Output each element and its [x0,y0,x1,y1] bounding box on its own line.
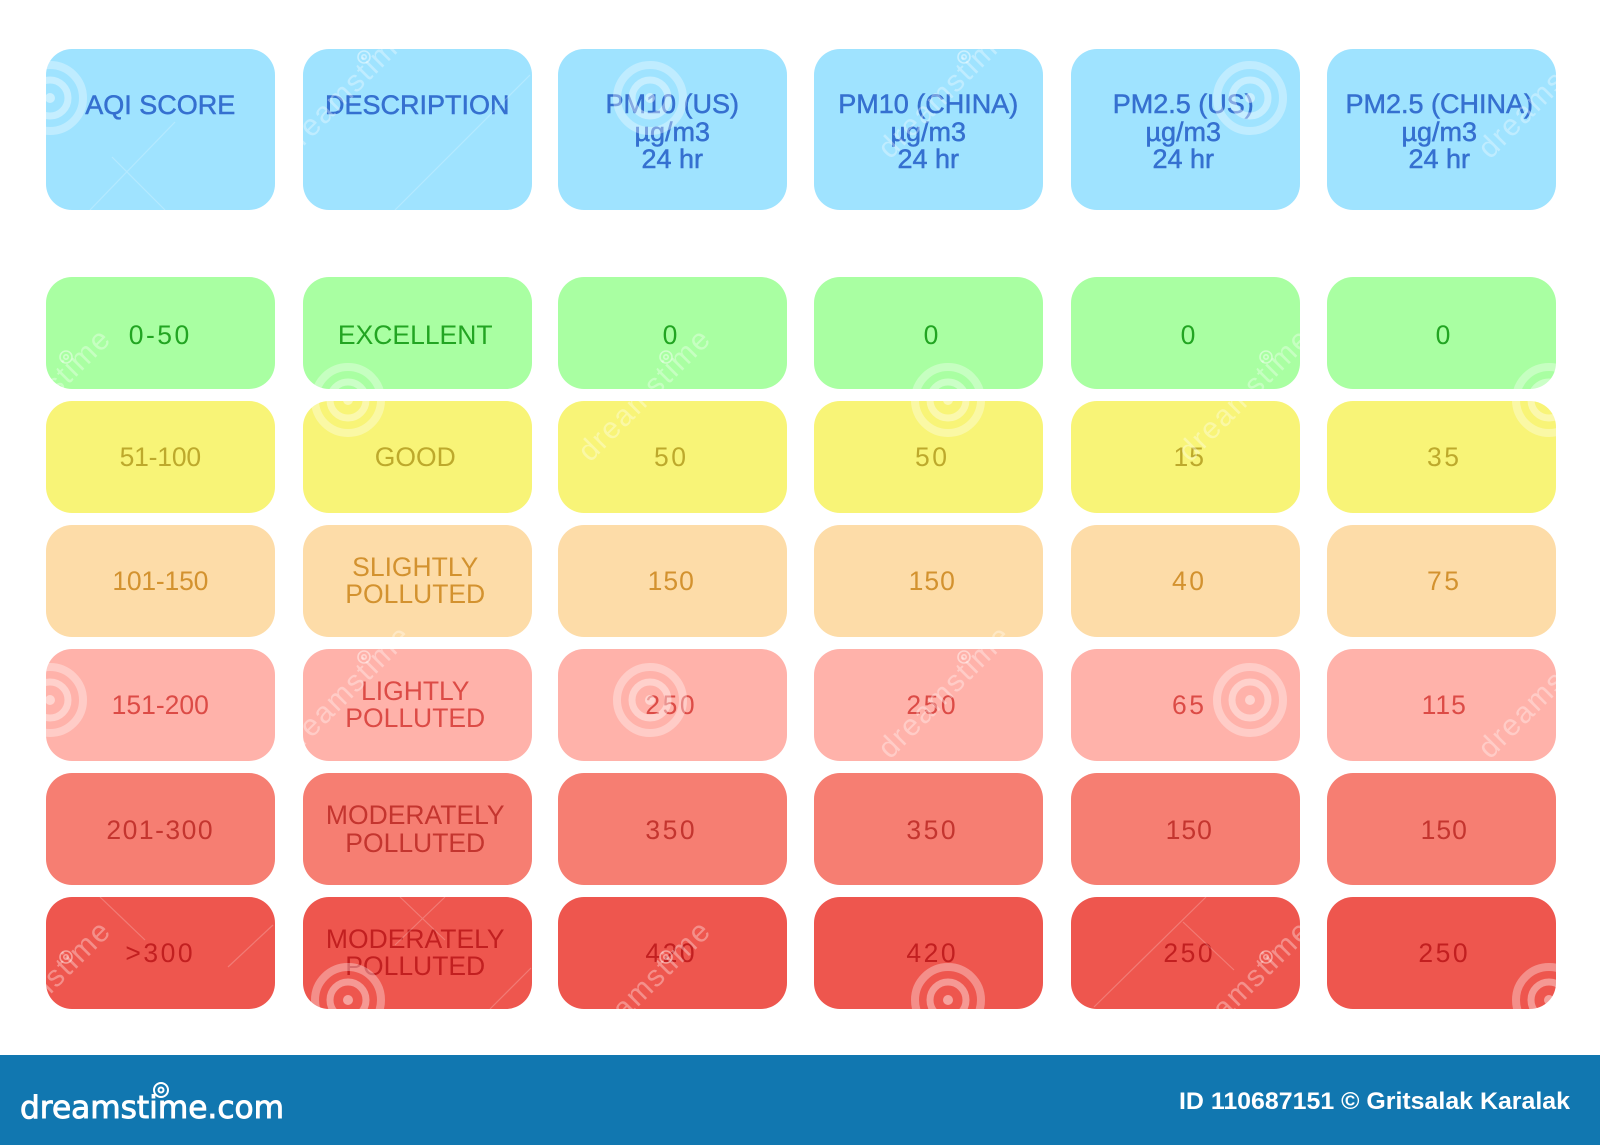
header: PM10 China: 24 hr [897,144,959,174]
header: PM10 China: µg/m3 [890,116,966,146]
description: POLLUTED [345,828,485,858]
header: PM2.5 US: PM2.5 (US) [1113,89,1254,119]
row: heavily polluted band [46,897,1556,1009]
header: PM2.5 US: µg/m3 [1145,116,1221,146]
header: PM10 US [558,49,786,210]
PM10 China value: 350 [906,815,958,845]
watermark overlay: dreamstime [572,323,717,468]
PM10 China value: 150 [909,566,956,596]
watermark overlay: dreamstime [872,620,1017,765]
description: POLLUTED [345,703,485,733]
PM2.5 US value: 40 [1172,566,1206,596]
PM2.5 China value: 150 [1421,815,1468,845]
PM10 US value [558,897,786,1009]
PM2.5 China value: 0 [1436,320,1453,350]
PM2.5 US value: 150 [1166,815,1213,845]
PM10 China value [814,525,1042,637]
row: slightly polluted [46,525,1556,637]
footer logo text: dreamstime.com [20,1090,284,1126]
PM10 China value [814,277,1042,389]
PM2.5 China value: 250 [1418,938,1470,968]
PM10 China value: 420 [906,938,958,968]
PM10 US value [558,649,786,761]
image ID and credit: ID 110687151 © Gritsalak Karalak [1179,1088,1571,1115]
PM10 China value [814,401,1042,513]
AQI range: 0-50 [129,320,192,350]
PM10 US value: 50 [654,442,688,472]
PM2.5 China value [1327,525,1556,637]
PM10 China value [814,649,1042,761]
PM2.5 US value [1071,401,1300,513]
description [303,649,532,761]
PM10 China value: 0 [924,320,941,350]
PM2.5 China value: 75 [1427,566,1461,596]
PM2.5 China value [1327,277,1556,389]
logo spiral icon [154,1083,168,1097]
PM10 US value: 150 [648,566,695,596]
description: POLLUTED [345,579,485,609]
PM2.5 US value: 15 [1174,442,1205,472]
PM10 US value: 350 [645,815,697,845]
AQI range [46,277,274,389]
PM10 US value: 250 [645,690,697,720]
header: description: DESCRIPTION [325,90,510,120]
description: EXCELLENT [338,320,493,350]
header: PM2.5 US: 24 hr [1152,144,1214,174]
AQI range [46,649,274,761]
PM2.5 China value [1327,772,1556,884]
AQI range: 101-150 [112,566,208,596]
header: PM2.5 US [1071,49,1300,210]
footer bar [0,1055,1600,1145]
header: PM2.5 China [1327,49,1556,210]
AQI range: 151-200 [112,690,209,720]
AQI range: 201-300 [106,815,214,845]
PM2.5 US value [1071,525,1300,637]
header: PM2.5 China: 24 hr [1408,144,1470,174]
AQI range [46,772,274,884]
header: PM10 China: PM10 (CHINA) [838,89,1018,119]
description: POLLUTED [345,951,485,981]
watermark overlay: dreamstime [872,20,1017,165]
PM10 China value: 50 [915,442,949,472]
PM10 US value [558,277,786,389]
description [303,525,532,637]
PM2.5 China value [1327,897,1556,1009]
watermark overlay: dreamstime [1172,323,1317,468]
watermark overlay: dreamstime [272,20,417,165]
header: PM10 US: µg/m3 [634,116,710,146]
description: SLIGHTLY [352,552,478,582]
header: AQI score: AQI SCORE [85,90,235,120]
PM2.5 US value: 250 [1163,938,1215,968]
description [303,277,532,389]
PM2.5 US value: 0 [1181,320,1198,350]
header: PM2.5 China: PM2.5 (CHINA) [1345,89,1533,119]
AQI range: 51-100 [120,442,201,472]
PM10 China value [814,897,1042,1009]
PM2.5 US value [1071,897,1300,1009]
PM10 US value [558,525,786,637]
row: moderately polluted [46,773,1556,885]
PM2.5 China value: 115 [1422,690,1467,720]
header: AQI score [46,49,274,210]
PM2.5 China value: 35 [1427,442,1461,472]
PM10 China value [814,772,1042,884]
description [303,772,532,884]
description: LIGHTLY [361,676,469,706]
header row [46,49,1556,210]
description [303,897,532,1009]
header: PM10 US: PM10 (US) [605,89,739,119]
AQI range: >300 [125,938,195,968]
PM2.5 China value [1327,649,1556,761]
PM2.5 China value [1327,401,1556,513]
AQI range [46,897,274,1009]
PM2.5 US value [1071,277,1300,389]
PM2.5 US value [1071,772,1300,884]
PM10 China value: 250 [906,690,958,720]
PM10 US value [558,401,786,513]
header: description [303,49,532,210]
header: PM10 China [814,49,1042,210]
description: GOOD [375,442,456,472]
watermark overlay: dreamstime [272,620,417,765]
PM2.5 US value: 65 [1172,690,1206,720]
header: PM10 US: 24 hr [641,144,703,174]
PM10 US value: 0 [663,320,680,350]
AQI range [46,401,274,513]
PM10 US value: 420 [645,938,697,968]
description [303,401,532,513]
description: MODERATELY [326,924,505,954]
header: PM2.5 China: µg/m3 [1401,116,1477,146]
row: excellent [46,277,1556,389]
description: MODERATELY [326,800,505,830]
AQI range [46,525,274,637]
PM2.5 US value [1071,649,1300,761]
row: lightly polluted [46,649,1556,761]
PM10 US value [558,772,786,884]
row: good [46,401,1556,513]
